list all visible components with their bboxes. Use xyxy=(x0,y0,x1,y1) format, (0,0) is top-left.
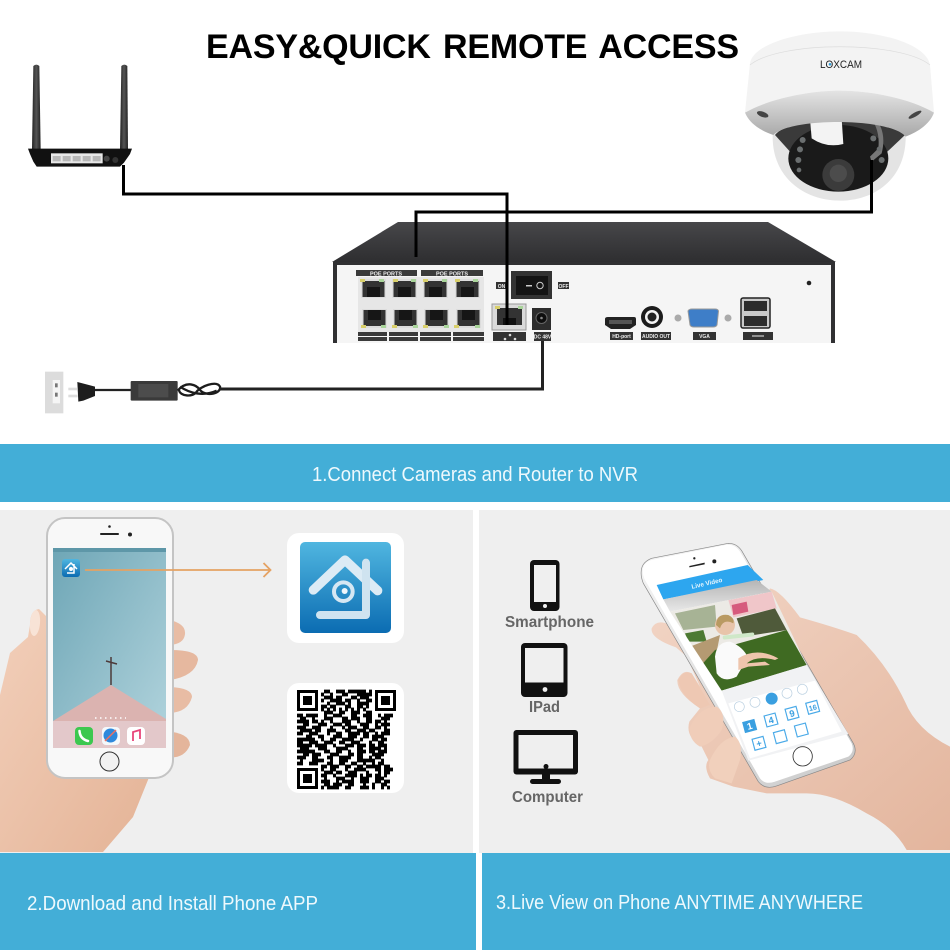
wire: power to NVR xyxy=(220,341,542,389)
phone body xyxy=(47,518,173,778)
label: smartphone: Smartphone xyxy=(505,614,594,631)
icon: dome camera xyxy=(745,31,934,201)
banner 1: 1.Connect Cameras and Router to NVR xyxy=(312,463,638,486)
app header title: Live Video xyxy=(691,577,723,591)
phone screen xyxy=(53,548,166,748)
church roof xyxy=(53,685,166,721)
DC power port: DC 48V xyxy=(534,335,552,341)
VGA port: VGA xyxy=(699,334,710,340)
camera arm xyxy=(870,120,883,162)
wall socket xyxy=(45,372,63,413)
gray strip xyxy=(663,580,772,612)
HDMI port: HD-port xyxy=(612,334,631,340)
camera interior xyxy=(788,125,888,192)
home button xyxy=(100,752,119,771)
QR code xyxy=(287,683,404,793)
title: EASY&QUICK REMOTE ACCESS xyxy=(206,28,739,66)
hand and phone illustration xyxy=(641,543,950,850)
wire: camera to NVR xyxy=(416,160,872,257)
VGA port xyxy=(674,309,732,340)
plug xyxy=(77,382,95,402)
wire: router to NVR xyxy=(124,165,507,325)
live video photo xyxy=(670,592,806,690)
arrow xyxy=(85,563,270,577)
label: iPad: IPad xyxy=(529,699,560,716)
status indicator xyxy=(807,281,811,285)
power switch: OFF xyxy=(558,284,568,290)
split-view buttons: 1 xyxy=(746,721,754,732)
POE ports labels: POE PORTS xyxy=(436,271,468,277)
hand holding phone xyxy=(0,609,198,852)
camera interior shoulders xyxy=(775,120,905,152)
cable coil xyxy=(178,384,220,395)
USB ports xyxy=(741,298,773,340)
page dots xyxy=(95,717,126,719)
dock icon: safari xyxy=(102,727,120,745)
phone earpiece xyxy=(689,557,716,567)
fingers xyxy=(678,672,741,783)
icon: smartphone xyxy=(530,560,560,611)
phone dock xyxy=(53,721,166,748)
dock icon: phone xyxy=(75,727,93,745)
camera dome xyxy=(773,121,906,201)
power switch: ON xyxy=(498,284,506,290)
audio port: AUDIO OUT xyxy=(642,334,670,340)
church cross xyxy=(106,657,117,685)
home button xyxy=(793,747,812,766)
camera top housing xyxy=(745,31,934,113)
POE ports labels xyxy=(356,270,483,277)
phone app header xyxy=(657,565,763,599)
split-view buttons: 9 xyxy=(788,708,796,719)
camera lens mount xyxy=(810,119,843,145)
phone speaker and camera xyxy=(100,525,132,536)
split-view buttons xyxy=(742,700,820,750)
HDMI port xyxy=(605,317,636,340)
adapter brick xyxy=(131,381,178,401)
baby xyxy=(715,642,748,679)
banner 3: 3.Live View on Phone ANYTIME ANYWHERE xyxy=(496,891,863,914)
POE ports xyxy=(358,277,484,332)
camera lens xyxy=(822,159,854,191)
power switch xyxy=(496,271,569,299)
DC power port xyxy=(532,308,552,341)
panel: download app xyxy=(0,510,473,853)
camera LEDs xyxy=(795,135,885,172)
small app icon xyxy=(62,559,80,577)
panel: live view xyxy=(479,510,950,853)
split-view buttons: 4 xyxy=(767,715,776,726)
banner 3 xyxy=(482,853,950,950)
banner 2 xyxy=(0,853,476,950)
icon: power adapter xyxy=(45,372,220,413)
app icon tile xyxy=(287,533,404,643)
icon: router xyxy=(28,65,132,167)
round control buttons xyxy=(734,684,807,712)
split-view buttons: + xyxy=(755,738,764,749)
label: computer: Computer xyxy=(512,789,583,806)
audio port xyxy=(641,306,671,340)
icon: iPad xyxy=(521,643,568,697)
camera logo text: LOXCAM xyxy=(820,59,862,71)
NVR front panel xyxy=(333,262,835,331)
adapter cord xyxy=(95,386,132,393)
camera housing ring xyxy=(745,91,934,137)
POE ports labels: POE PORTS xyxy=(370,271,402,277)
banner 2: 2.Download and Install Phone APP xyxy=(27,892,318,915)
lower control area xyxy=(722,665,848,761)
hand xyxy=(652,588,950,850)
split-view buttons: 16 xyxy=(808,702,818,713)
camera logo dot xyxy=(829,63,831,66)
NVR top cover xyxy=(332,222,836,262)
phone body xyxy=(641,543,855,787)
port number strip xyxy=(358,332,484,341)
banner 1 xyxy=(0,444,950,502)
panel: NVR recorder xyxy=(332,222,836,343)
dock icon: music xyxy=(127,727,145,745)
LAN port xyxy=(492,304,526,341)
icon: computer xyxy=(514,730,578,784)
